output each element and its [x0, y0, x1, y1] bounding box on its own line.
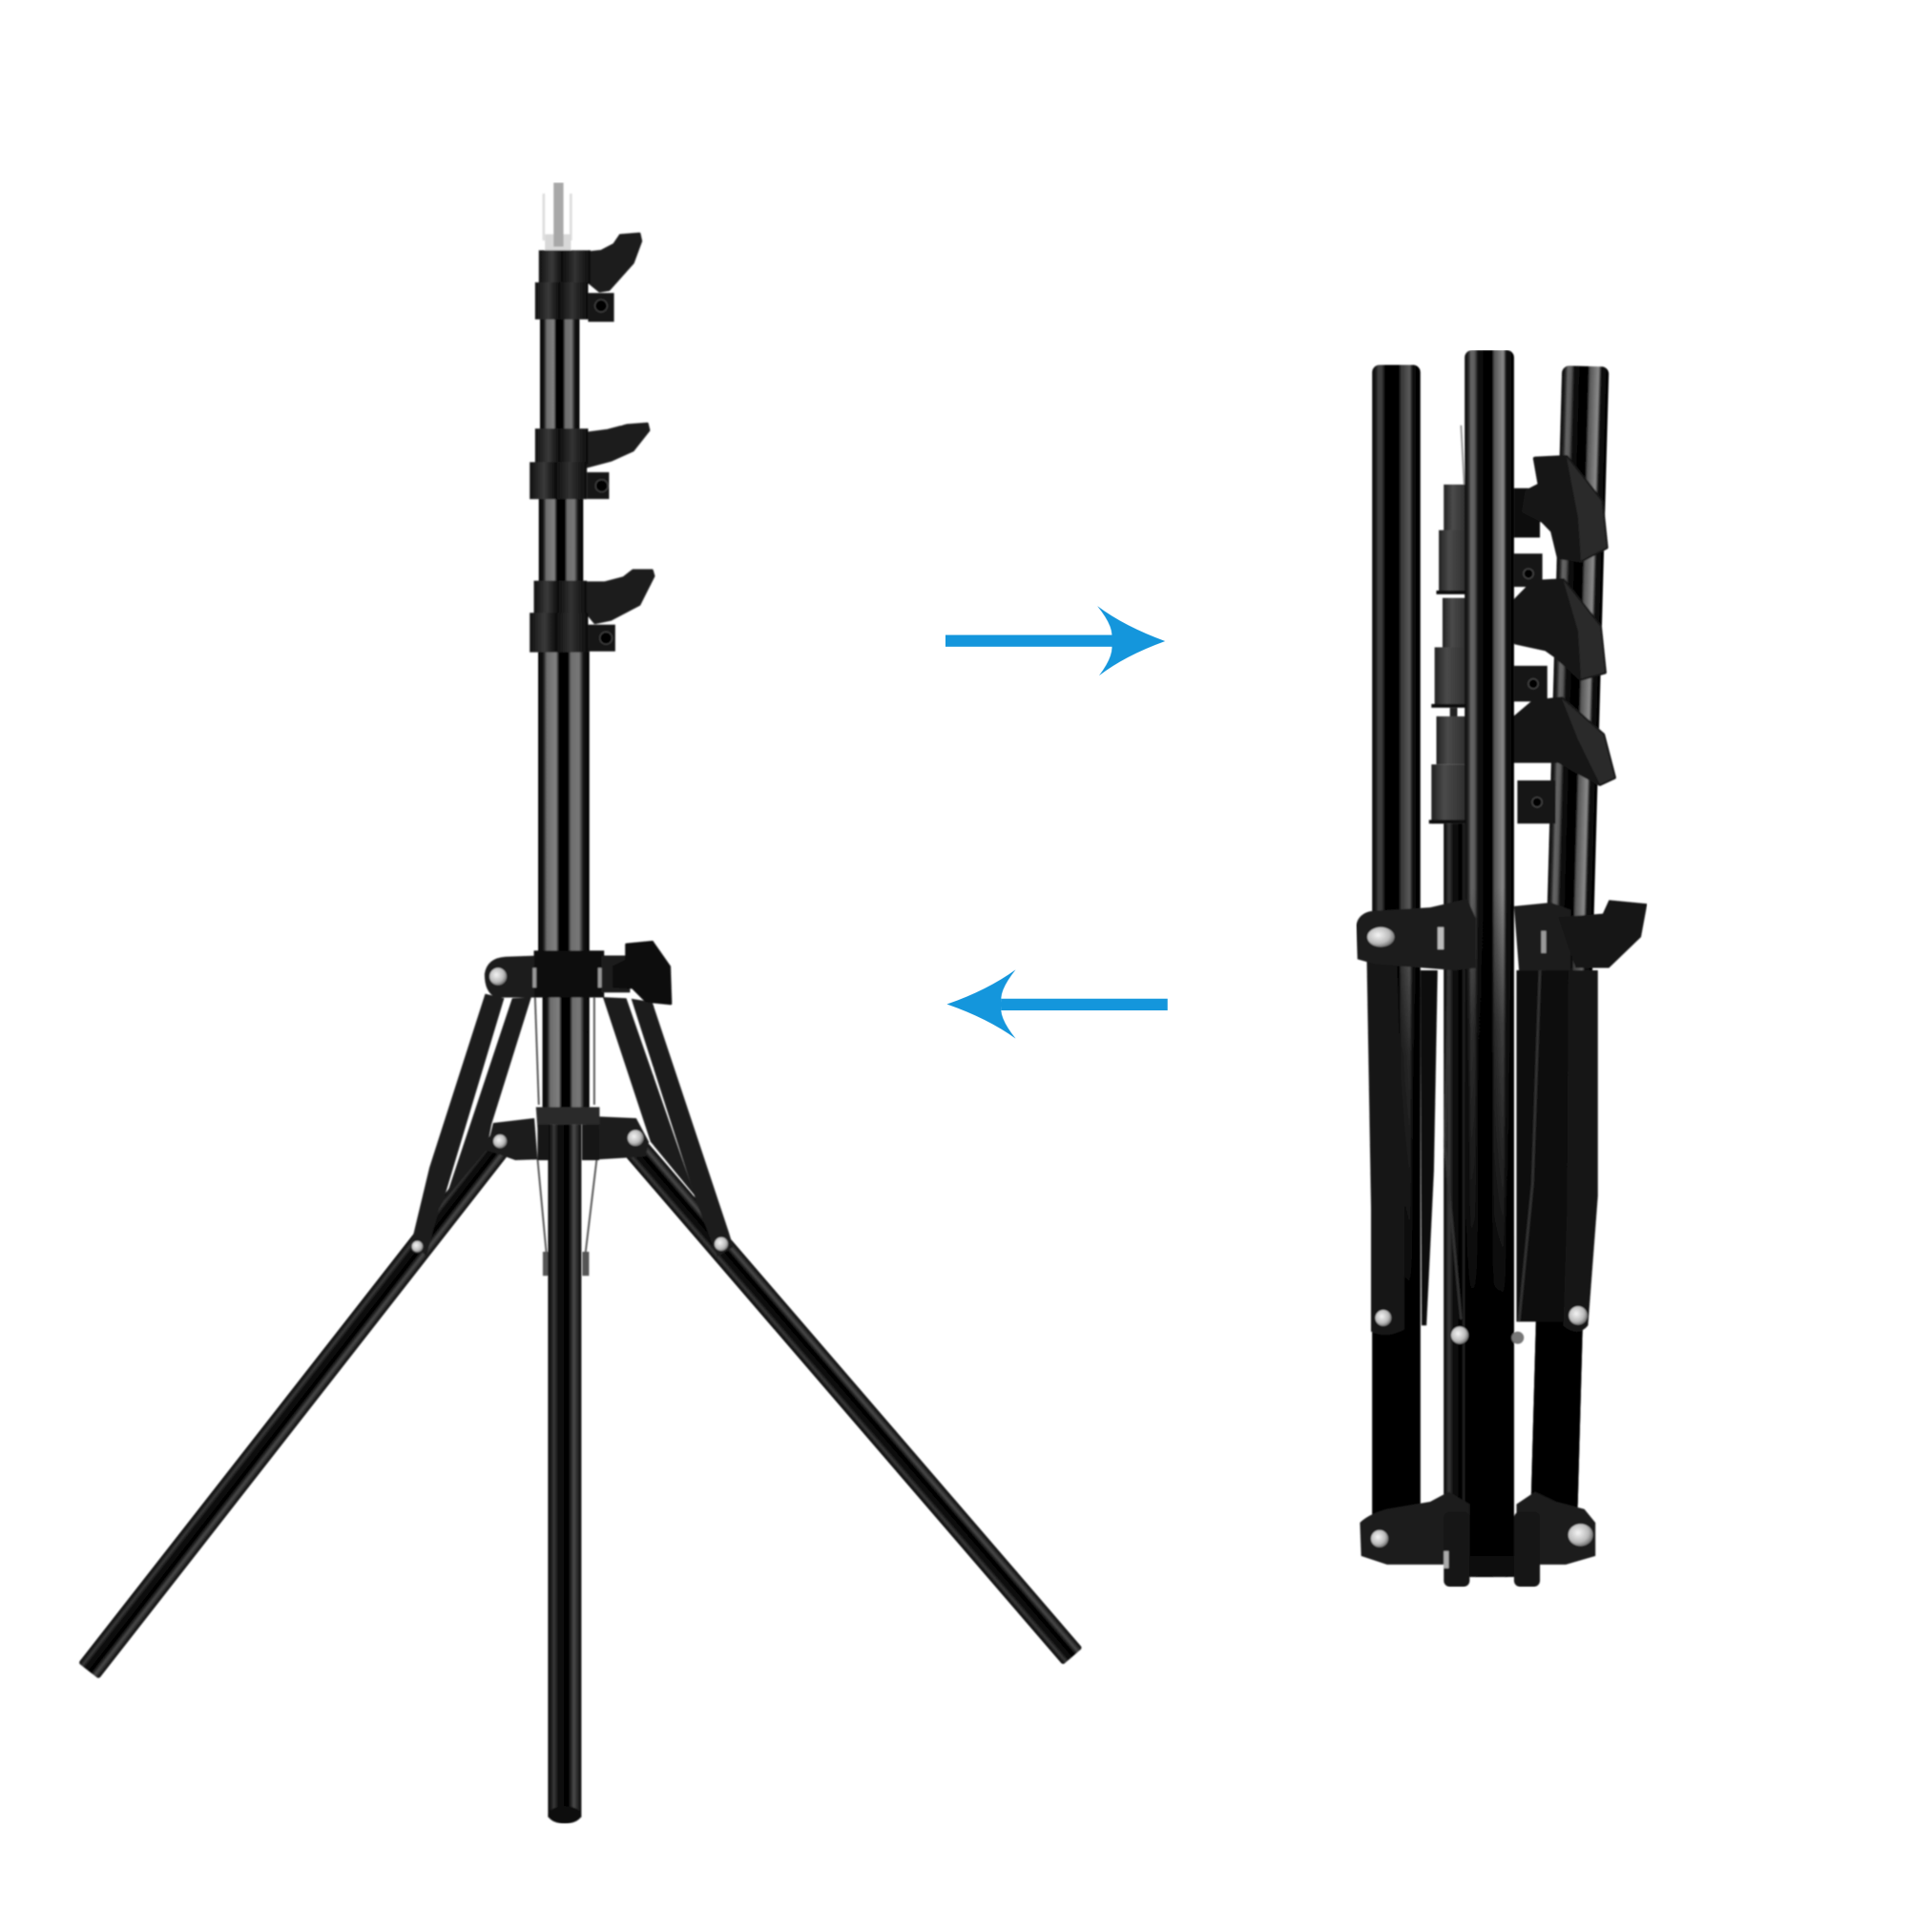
bolts on folded wires [1451, 1326, 1524, 1344]
top clamp [535, 234, 641, 322]
wires [535, 997, 596, 1275]
arrow: folded to open [946, 969, 1168, 1039]
folded knob clamps [1514, 457, 1614, 823]
lower hub [487, 1107, 649, 1160]
right leg [619, 1132, 1083, 1665]
right leg pivot bolt [714, 1236, 729, 1252]
centre leg [548, 1125, 581, 1823]
hub locking knob [614, 942, 671, 1004]
left leg pivot bolt [411, 1240, 424, 1253]
folded stand [1357, 350, 1647, 1587]
right strut [603, 997, 734, 1257]
spigot [543, 182, 572, 250]
arrow: open to folded [945, 606, 1165, 675]
upper right folded clamp [1514, 900, 1647, 970]
centre column tube [538, 315, 590, 1110]
lower clamp [530, 571, 654, 653]
open tripod stand [78, 182, 1083, 1823]
left folded leg [1372, 365, 1421, 1530]
left leg [78, 1132, 513, 1679]
upper hub [485, 950, 630, 997]
inner struts [1421, 970, 1570, 1325]
left folded strut [1367, 962, 1404, 1335]
centre folded leg [1465, 350, 1514, 1577]
folded centre column segments [1429, 426, 1473, 1517]
right folded leg [1530, 365, 1609, 1510]
folded wires [1445, 970, 1540, 1321]
left strut [412, 994, 531, 1257]
upper left folded clamp [1357, 899, 1476, 970]
right folded strut [1564, 970, 1598, 1332]
middle clamp [530, 424, 649, 499]
bottom clamp [1360, 1492, 1595, 1587]
